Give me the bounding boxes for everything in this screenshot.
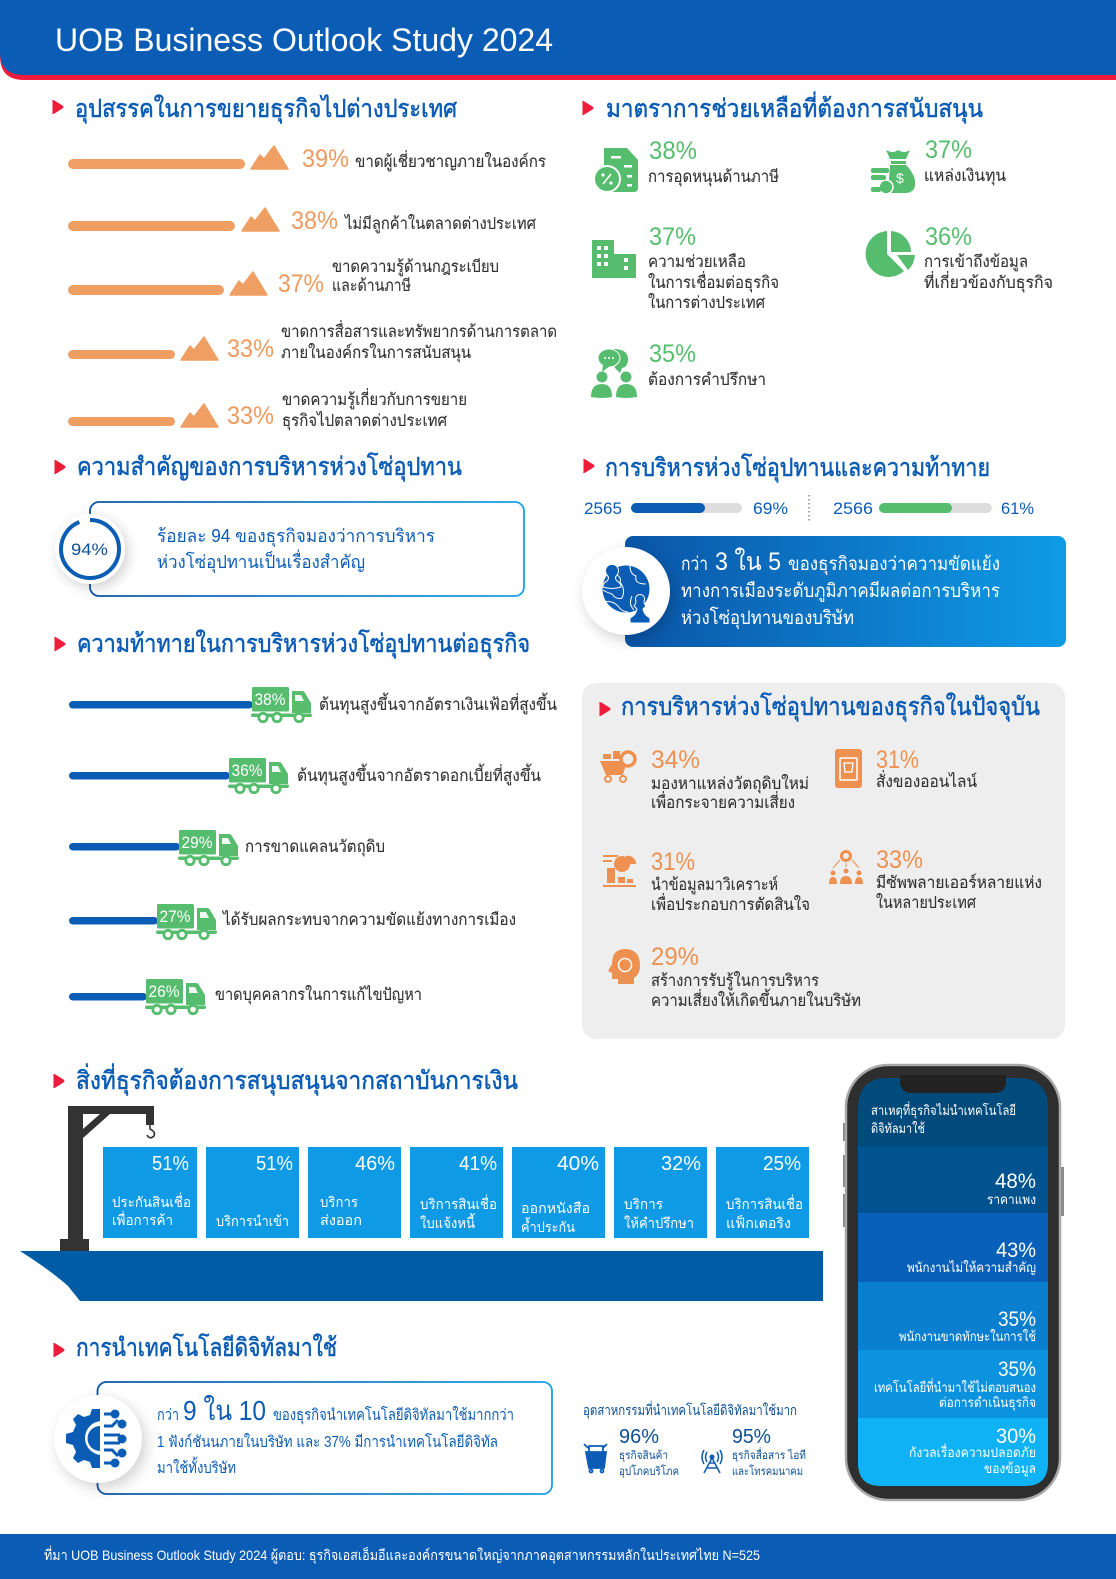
stat: technology mismatch: 35% <box>998 1358 1036 1381</box>
callout: 3 in 5 <box>582 536 1066 647</box>
container: export services: ส่งออก <box>320 1212 362 1228</box>
item: multiple suppliers: 33% <box>876 846 923 874</box>
item: business connection: ความช่วยเหลือ <box>648 253 746 271</box>
container: export services: 46% <box>355 1153 395 1175</box>
item: data analysis: นำข้อมูลมาวิเคราะห์ <box>651 875 778 895</box>
callout: 9 in 10: มาใช้ทั้งบริษัท <box>157 1456 236 1477</box>
item: business connection: 37% <box>649 223 696 251</box>
heading: support measures: มาตราการช่วยเหลือที่ต้องการสนับสนุน <box>606 91 983 124</box>
phone heading: ดิจิทัลมาใช้ <box>871 1120 925 1136</box>
container: factoring: แฟ็กเตอริง <box>726 1214 791 1231</box>
item: business connection <box>592 223 779 312</box>
stat: staff lack skills: 35% <box>998 1308 1036 1331</box>
panel: supply chain challenges for business <box>55 629 557 1014</box>
container: trade credit guarantee <box>103 1147 197 1238</box>
stat: expensive: 48% <box>995 1170 1036 1193</box>
row: 33% knowledge: ธุรกิจไปตลาดต่างประเทศ <box>282 411 447 431</box>
stat: data security: 30% <box>996 1425 1036 1448</box>
item: multiple suppliers: ในหลายประเทศ <box>876 893 976 912</box>
row: 26% staff: 26% <box>148 982 180 1001</box>
title: UOB Business Outlook Study 2024 <box>55 22 553 58</box>
phone heading <box>871 1101 1016 1136</box>
panel: supply chain importance <box>55 452 524 596</box>
row: 38% inflation: 38% <box>254 690 286 709</box>
heading: current management: การบริหารห่วงโซ่อุปทานของธุรกิจในปัจจุบัน <box>621 692 1040 722</box>
panel: desired support measures <box>583 91 1053 398</box>
bar: 2566: 2566 <box>833 499 873 518</box>
container: trade credit guarantee: 51% <box>152 1153 189 1175</box>
stat: technology mismatch <box>874 1358 1036 1411</box>
row: 29% materials: 29% <box>182 833 212 852</box>
item: online ordering: 31% <box>876 746 919 774</box>
stat: consumer goods: 96% <box>619 1426 659 1448</box>
row: 33% communication: 33% <box>227 335 274 363</box>
callout: 3 in 5: กว่า <box>681 553 708 574</box>
item: business connection: ในการต่างประเทศ <box>648 293 765 312</box>
row: 29% materials: การขาดแคลนวัตถุดิบ <box>245 838 385 857</box>
callout: 9 in 10: กว่า <box>157 1407 179 1424</box>
container: advisory <box>614 1147 707 1238</box>
container: letter of guarantee <box>512 1147 605 1238</box>
icon: tax document <box>594 148 638 192</box>
item: risk awareness <box>608 943 861 1010</box>
stat: data security <box>909 1425 1036 1477</box>
row: 38%: ไม่มีลูกค้าในตลาดต่างประเทศ <box>343 214 536 234</box>
item: information access: ที่เกี่ยวข้องกับธุรกิจ <box>924 271 1053 293</box>
row: 27% politics: 27% <box>160 907 190 926</box>
row: 36% interest: 36% <box>232 761 262 780</box>
item: information access <box>866 223 1053 293</box>
callout: 3 in 5: ของธุรกิจมองว่าความขัดแย้ง <box>788 553 1000 576</box>
container: import services: บริการนำเข้า <box>216 1213 289 1229</box>
heading: challenges: ความท้าทายในการบริหารห่วงโซ่อุปทานต่อธุรกิจ <box>77 629 530 659</box>
callout: 9 in 10: 9 ใน 10 <box>183 1394 266 1426</box>
item: multiple suppliers <box>829 846 1042 912</box>
panel: current supply chain management <box>582 683 1065 1039</box>
icon: cart and gear <box>600 751 635 782</box>
heading: importance: ความสำคัญของการบริหารห่วงโซ่อุปทาน <box>77 452 462 482</box>
stat: telecom: และโทรคมนาคม <box>732 1464 803 1478</box>
phone: reasons for not adopting digital technology <box>843 1065 1064 1500</box>
item: new material sources: เพื่อกระจายความเสี่ยง <box>651 791 795 812</box>
item: new material sources: มองหาแหล่งวัตถุดิบใหม่ <box>651 774 809 794</box>
container: trade credit guarantee: ประกันสินเชื่อ <box>112 1193 191 1210</box>
item: online ordering <box>835 746 977 791</box>
item: funding <box>871 136 1006 194</box>
row: 39%: ขาดผู้เชี่ยวชาญภายในองค์กร <box>355 150 546 172</box>
callout: 94 percent: 94% <box>71 540 108 559</box>
callout: 94 percent: ห่วงโซ่อุปทานเป็นเรื่องสำคัญ <box>157 549 365 573</box>
stat: consumer goods: ธุรกิจสินค้า <box>619 1449 668 1462</box>
row: 38% inflation: ต้นทุนสูงขึ้นจากอัตราเงินเฟ้อที่สูงขึ้น <box>319 692 557 715</box>
stat: telecom <box>732 1426 806 1478</box>
heading: management and challenges: การบริหารห่วงโซ่อุปทานและความท้าทาย <box>605 453 990 483</box>
container: advisory: ให้คำปรึกษา <box>624 1215 694 1231</box>
container: invoice financing: บริการสินเชื่อ <box>420 1195 497 1212</box>
panel: supply chain management and challenges <box>582 453 1066 647</box>
icon: globe and chess pieces <box>602 564 650 623</box>
container: advisory: บริการ <box>624 1196 663 1212</box>
icon: shopping cart <box>584 1444 607 1472</box>
row: 26% staff: ขาดบุคคลากรในการแก้ไขปัญหา <box>215 985 422 1005</box>
row: 33% communication <box>68 320 557 363</box>
item: consulting <box>591 340 766 398</box>
illustration: ship hull <box>20 1251 823 1301</box>
row: 27% politics <box>69 904 516 939</box>
item: tax <box>594 137 779 192</box>
item: multiple suppliers: มีซัพพลายเออร์หลายแห่ง <box>876 873 1042 892</box>
row: 39%: 39% <box>302 145 349 173</box>
icon: head with gear <box>608 949 640 984</box>
stat: expensive: ราคาแพง <box>987 1192 1036 1207</box>
row: 36% interest: ต้นทุนสูงขึ้นจากอัตราดอกเบี้ยที่สูงขึ้น <box>297 763 541 786</box>
container: factoring <box>716 1147 809 1238</box>
row: 29% materials <box>69 830 385 865</box>
bar: 2565 <box>584 499 788 518</box>
row: 37%: ขาดความรู้ด้านกฎระเบียบ <box>332 258 499 277</box>
stat: data security: ของข้อมูล <box>984 1461 1036 1477</box>
row: 33% knowledge: ขาดความรู้เกี่ยวกับการขยาย <box>282 388 467 410</box>
icon: shopping tablet <box>835 749 862 788</box>
container: export services: บริการ <box>320 1194 358 1210</box>
item: data analysis: 31% <box>651 848 695 876</box>
row: 37%: 37% <box>278 270 324 298</box>
item: funding: แหล่งเงินทุน <box>924 167 1006 186</box>
stat: staff disregard <box>907 1239 1036 1275</box>
panel: top adopting industries <box>583 1401 806 1478</box>
item: risk awareness: สร้างการรับรู้ในการบริหาร <box>651 971 819 991</box>
container: factoring: 25% <box>763 1153 801 1175</box>
row: 38% inflation <box>69 687 557 722</box>
callout: 9 in 10: 1 ฟังก์ชันนภายในบริษัท และ 37% มีการนำเทคโนโลยีดิจิทัล <box>157 1433 498 1451</box>
item: consulting: 35% <box>649 340 696 368</box>
icon: chart <box>603 855 636 887</box>
icon: buildings <box>592 240 636 278</box>
item: new material sources <box>600 746 809 812</box>
row: 27% politics: ได้รับผลกระทบจากความขัดแย้งทางการเมือง <box>221 910 516 929</box>
callout: 3 in 5: 3 ใน 5 <box>715 547 781 576</box>
panel: top adopting industries: อุตสาหกรรมที่นำเทคโนโลยีดิจิทัลมาใช้มาก <box>583 1401 797 1419</box>
row: 38%: 38% <box>291 207 338 235</box>
item: tax: 38% <box>649 137 697 165</box>
panel: support needed from financial institutions <box>20 1063 823 1301</box>
header banner <box>0 0 1116 80</box>
row: 39% <box>68 145 546 173</box>
container: trade credit guarantee: เพื่อการค้า <box>112 1211 173 1228</box>
icon: pie chart <box>866 231 915 277</box>
illustration: crane <box>60 1106 154 1251</box>
item: online ordering: สั่งของออนไลน์ <box>876 770 977 791</box>
callout: 9 in 10 <box>54 1382 552 1494</box>
item: information access: การเข้าถึงข้อมูล <box>924 253 1028 272</box>
icon: gear and circuit <box>66 1409 126 1468</box>
row: 33% knowledge: 33% <box>227 402 274 430</box>
icon: people talking <box>591 349 637 398</box>
stat: staff disregard: 43% <box>996 1239 1036 1262</box>
item: data analysis: เพื่อประกอบการตัดสินใจ <box>651 893 810 914</box>
container: letter of guarantee: ค้ำประกัน <box>521 1217 575 1235</box>
footer <box>0 1534 1116 1579</box>
container: import services: 51% <box>256 1153 293 1175</box>
container: invoice financing: ใบแจ้งหนี้ <box>420 1213 475 1231</box>
icon: supplier network <box>829 850 863 884</box>
row: 37%: และด้านภาษี <box>332 277 411 295</box>
container: invoice financing <box>410 1147 503 1238</box>
callout: 3 in 5: ห่วงโซ่อุปทานของบริษัท <box>681 606 854 630</box>
row: 36% interest <box>69 758 541 793</box>
phone heading: สาเหตุที่ธุรกิจไม่นำเทคโนโลยี <box>871 1101 1016 1119</box>
item: business connection: ในการเชื่อมต่อธุรกิจ <box>648 271 779 293</box>
stat: consumer goods: อุปโภคบริโภค <box>619 1464 679 1478</box>
heading: digital adoption: การนำเทคโนโลยีดิจิทัลมาใช้ <box>76 1333 337 1362</box>
stat: consumer goods <box>619 1426 679 1478</box>
container: advisory: 32% <box>661 1153 701 1175</box>
callout: 94 percent <box>55 502 524 596</box>
panel: obstacles to overseas expansion <box>53 94 557 431</box>
bar: 2566 <box>833 499 1034 518</box>
item: tax: การอุดหนุนด้านภาษี <box>648 168 779 187</box>
row: 33% communication: ขาดการสื่อสารและทรัพยากรด้านการตลาด <box>281 320 557 341</box>
stat: telecom: ธุรกิจสื่อสาร ไอที <box>732 1447 806 1462</box>
container: factoring: บริการสินเชื่อ <box>726 1195 803 1212</box>
bar: 2565: 69% <box>753 499 788 518</box>
bar: 2565: 2565 <box>584 499 622 518</box>
row: 26% staff <box>69 979 422 1014</box>
heading: obstacles: อุปสรรคในการขยายธุรกิจไปต่างประเทศ <box>75 94 457 124</box>
stat: staff lack skills <box>899 1308 1036 1344</box>
stat: telecom: 95% <box>732 1426 771 1448</box>
item: funding: 37% <box>925 136 972 164</box>
icon: signal tower <box>702 1450 722 1473</box>
container: import services <box>206 1147 299 1238</box>
callout: 9 in 10: ของธุรกิจนำเทคโนโลยีดิจิทัลมาใช้มากกว่า <box>273 1406 514 1425</box>
callout: 3 in 5: ทางการเมืองระดับภูมิภาคมีผลต่อการบริหาร <box>681 580 1000 602</box>
row: 33% communication: ภายในองค์กรในการสนับสนุน <box>281 343 471 363</box>
item: data analysis <box>603 848 810 914</box>
container: letter of guarantee: 40% <box>557 1153 599 1175</box>
row: 33% knowledge <box>68 388 467 431</box>
stat: staff lack skills: พนักงานขาดทักษะในการใช้ <box>899 1328 1036 1344</box>
stat: expensive <box>987 1170 1036 1207</box>
container: export services <box>308 1147 401 1238</box>
footer: ที่มา UOB Business Outlook Study 2024 ผู้ตอบ: ธุรกิจเอสเอ็มอีและองค์กรขนาดใหญ่จากภาคอุตสาหกรรมหลักในประเทศไทย N=525 <box>44 1546 760 1564</box>
row: 37% <box>68 258 499 298</box>
stat: technology mismatch: ต่อการดำเนินธุรกิจ <box>939 1395 1036 1411</box>
panel: digital technology adoption <box>54 1333 806 1494</box>
item: information access: 36% <box>925 223 972 251</box>
heading: financial support: สิ่งที่ธุรกิจต้องการสนุบสนุนจากสถาบันการเงิน <box>76 1063 518 1096</box>
container: invoice financing: 41% <box>459 1153 497 1175</box>
container: letter of guarantee: ออกหนังสือ <box>521 1200 590 1216</box>
stat: technology mismatch: เทคโนโลยีที่นำมาใช้ไม่ตอบสนอง <box>874 1378 1036 1395</box>
icon: money bag: $ <box>896 170 904 186</box>
row: 38% <box>68 207 536 235</box>
item: new material sources: 34% <box>651 746 700 774</box>
item: risk awareness: ความเสี่ยงให้เกิดขึ้นภายในบริษัท <box>651 988 861 1010</box>
stat: data security: กังวลเรื่องความปลอดภัย <box>909 1443 1036 1460</box>
item: consulting: ต้องการคำปรึกษา <box>648 371 766 389</box>
item: risk awareness: 29% <box>651 943 699 971</box>
stat: staff disregard: พนักงานไม่ให้ความสำคัญ <box>907 1259 1036 1275</box>
callout: 94 percent: ร้อยละ 94 ของธุรกิจมองว่าการบริหาร <box>157 526 435 547</box>
bar: 2566: 61% <box>1001 499 1034 518</box>
